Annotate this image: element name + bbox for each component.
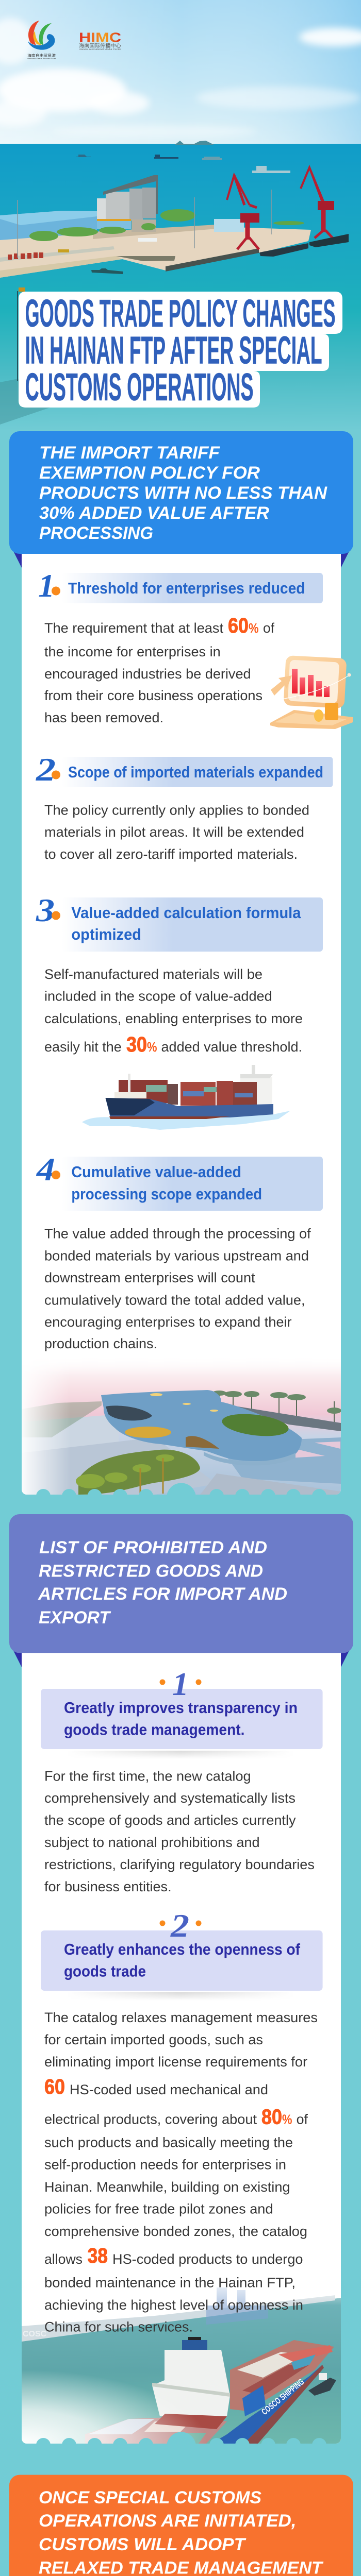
white building [214,219,244,232]
subheading 1: Greatly improves transparency in [64,1699,298,1717]
item 1 heading [38,567,323,604]
item 4 text: bonded materials by various upstream and [44,1248,309,1263]
subheading 2 text: bonded maintenance in the Hainan FTP, [44,2275,296,2290]
item 3 text: added value threshold. [161,1039,302,1055]
panel 1 header: PRODUCTS WITH NO LESS THAN [39,483,327,503]
subheading 2 text: policies for free trade pilot zones and [44,2201,273,2217]
item 4 text: cumulatively toward the total added value, [44,1292,305,1308]
subheading 2 text: HS-coded products to undergo [112,2251,303,2267]
hull [211,2365,322,2444]
subheading 1 text [44,1769,315,1894]
subheading 1 text: comprehensively and systematically lists [44,1790,296,1806]
item 4 text [44,1226,311,1351]
subheading 2 text: of [297,2111,308,2127]
item 2 text: to cover all zero-tariff imported materials. [44,846,298,862]
panel: list of prohibited and restricted goods [9,1514,353,2462]
item 3 text: % [147,1039,157,1055]
subheading 2: Greatly enhances the openness of [64,1940,301,1958]
item 1 text: from their core business operations [44,688,262,703]
subheading 1: 1 [172,1666,189,1702]
land [0,227,311,278]
card 2 body [22,1643,341,2444]
photo: seaside building at dusk [22,1355,341,1495]
panel 1 header: THE IMPORT TARIFF [39,443,220,463]
subheading 1 text: the scope of goods and articles currently [44,1812,296,1828]
docked ships [259,243,308,257]
item 3 text: 30 [126,1032,147,1056]
subheading 2: goods trade [64,1962,146,1980]
title [19,292,342,409]
panel 2 header: ARTICLES FOR IMPORT AND [38,1584,287,1604]
subheading 2 text: allows [44,2251,83,2267]
item 4 text: The value added through the processing of [44,1226,311,1242]
subheading 1 shadow [67,1751,294,1759]
illustration: container ship [82,1065,290,1130]
warehouse [0,211,97,240]
panel: import tariff exemption policy [9,431,353,1513]
hero photo: port and sea [0,0,361,431]
logo: Hainan Free Trade Port: Hainan Free Trade Port [27,58,56,60]
subheading 2 text: eliminating import license requirements for [44,2054,307,2070]
item 3 text: included in the scope of value-added [44,989,272,1004]
panel 3 header [9,2475,353,2576]
subheading 2 text: The catalog relaxes management measures [44,2010,318,2025]
panel: relaxed trade management measures [9,2475,353,2576]
subheading 2 text: 60 [44,2075,65,2098]
logo: HIMC: Hainan International Media Center [79,48,122,50]
building [101,1390,302,1461]
panel 3 header: CUSTOMS WILL ADOPT [39,2535,247,2554]
item 2 heading [36,751,333,788]
subheading 2 text: achieving the highest level of openness in [44,2297,303,2313]
item 4 heading: processing scope expanded [71,1185,262,1203]
tug [308,2378,336,2396]
panel 3 header: ONCE SPECIAL CUSTOMS [39,2488,261,2507]
item 1 text [44,614,274,725]
panel 1 header [9,431,353,554]
subheading 2 shadow [67,1992,294,2001]
subheading 2 text: China for such services. [44,2319,193,2335]
panel 2 header: EXPORT [39,1608,111,1628]
subheading 2 text: 80 [261,2105,282,2128]
lamp posts [18,190,271,258]
subheading 1 text: restrictions, clarifying regulatory boundaries [44,1857,315,1872]
photo: container ship at port: COSC [23,2330,47,2338]
subheading 2 text: such products and basically meeting the [44,2135,293,2150]
logo: Hainan Free Trade Port: 海南自由贸易港 [27,53,56,58]
subheading 1 [41,1666,323,1749]
panel 1 header: PROCESSING [39,523,153,543]
item 1 heading: 1 [38,567,55,604]
item 2 text: The policy currently only applies to bonded [44,803,309,818]
item 2 text [44,803,309,862]
item 1 text: of [263,620,274,636]
subheading 1 text: subject to national prohibitions and [44,1835,260,1850]
panel 3 header: OPERATIONS ARE INITIATED, [39,2511,296,2531]
item 1 heading: Threshold for enterprises reduced [68,579,305,597]
logo: HIMC: HIMC [79,30,121,45]
item 4 heading: 4 [36,1151,55,1188]
card 1 scalloped edge [36,1483,326,1513]
card 1 body [22,546,341,1495]
subheading 2 text: % [282,2111,292,2127]
logo: Hainan Free Trade Port [27,21,56,60]
item 3 heading [36,892,323,952]
logo: HIMC [79,30,122,50]
item 3 text: calculations, enabling enterprises to more [44,1011,303,1026]
item 4 text: production chains. [44,1336,157,1351]
ribbon folds [12,1649,350,1667]
subheading 1: goods trade management. [64,1721,244,1739]
trucks [8,252,43,260]
item 1 text: 60 [228,614,249,637]
subheading 1 text: for business entities. [44,1879,172,1894]
item 1 text: % [249,620,259,636]
palms [219,1395,335,1422]
subheading 2 text: for certain imported goods, such as [44,2032,263,2047]
deck containers [230,2340,334,2411]
subheading 2: 2 [170,1907,189,1944]
item 2 heading: 2 [36,751,56,788]
item 3 text [44,967,303,1056]
ribbon folds [12,549,350,568]
trees [29,209,304,241]
logo: HIMC: 海南国际传播中心 [79,43,122,49]
COSCO SHIPPING marking: COSCO SHIPPING [260,2377,306,2417]
subheading 2 [41,1907,323,1991]
subheading 2 text: HS-coded used mechanical and [70,2082,268,2097]
superstructure [152,2350,230,2416]
item 3 heading: Value-added calculation formula [71,904,301,922]
item 2 text: materials in pilot areas. It will be extended [44,824,304,840]
item 1 text: the income for enterprises in [44,644,221,659]
silos [97,198,131,229]
item 3 text: easily hit the [44,1039,122,1055]
panel 1 header: 30% ADDED VALUE AFTER [39,503,269,523]
photo: container ship at port [22,2275,341,2444]
subheading 2 text: 38 [88,2244,108,2267]
item 3 heading: optimized [71,925,141,943]
panel 1 header: EXEMPTION POLICY FOR [39,463,260,483]
item 1 text: has been removed. [44,710,163,725]
subheading 2 text: Hainan. Meanwhile, building on existing [44,2179,290,2195]
cranes [227,167,333,249]
trees foreground [78,1450,200,1495]
item 4 text: downstream enterprises will count [44,1270,255,1285]
icon: monitor with bar chart and coins [270,655,353,729]
item 4 heading [36,1151,323,1211]
panel 2 header: RESTRICTED GOODS AND [39,1562,263,1581]
item 2 heading: Scope of imported materials expanded [68,763,323,781]
panel 2 header: LIST OF PROHIBITED AND [39,1538,267,1557]
item 4 text: encouraging enterprises to expand their [44,1314,292,1330]
item 3 text: Self-manufactured materials will be [44,967,262,982]
card 2 scalloped edge [36,2432,326,2462]
subheading 2 text: electrical products, covering about [44,2111,257,2127]
panel 2 header [9,1514,353,1653]
subheading 2 text: self-production needs for enterprises in [44,2157,286,2172]
item 1 text: encouraged industries be derived [44,666,251,682]
item 3 heading: 3 [36,892,55,928]
subheading 1 text: For the first time, the new catalog [44,1769,251,1784]
subheading 2 text: comprehensive bonded zones, the catalog [44,2224,307,2239]
left faint ship [0,379,52,425]
subheading 2 text [44,2010,318,2335]
item 1 text: The requirement that at least [44,620,223,636]
item 4 heading: Cumulative value-added [71,1163,241,1181]
